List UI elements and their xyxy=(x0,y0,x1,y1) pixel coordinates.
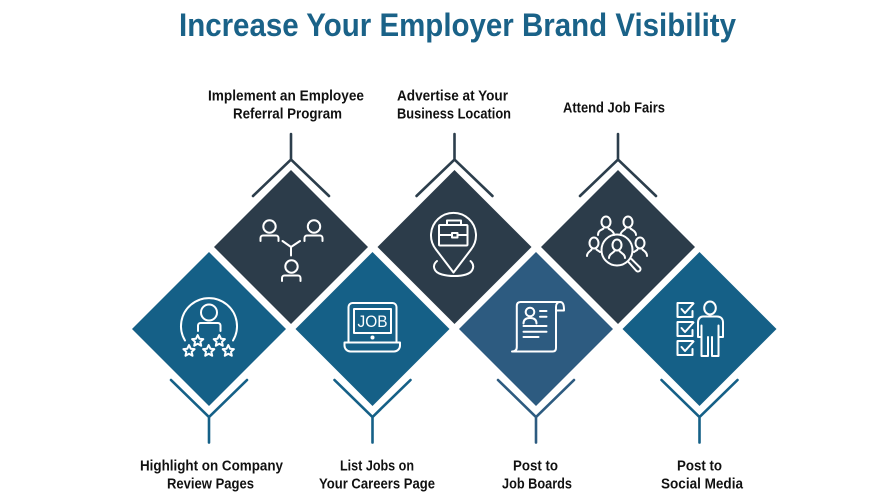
connector: employee referral xyxy=(253,134,329,196)
label: company review pages xyxy=(140,458,283,492)
icon: rated person xyxy=(181,298,237,356)
panel: business location xyxy=(378,88,532,324)
icon: referral network xyxy=(260,220,322,281)
label: job fairs: Attend Job Fairs xyxy=(563,100,665,116)
diamond: business location xyxy=(378,170,532,324)
icon: laptop with job text: JOB xyxy=(358,313,388,331)
connector: job boards xyxy=(498,380,574,442)
panel: job boards xyxy=(459,252,613,492)
label: business location: Advertise at Your xyxy=(397,88,508,104)
label: social media xyxy=(661,458,744,492)
diamond: job fairs xyxy=(541,170,695,324)
panel: job fairs xyxy=(541,100,695,324)
diamond: job boards xyxy=(459,252,613,406)
icon: people under magnifier xyxy=(587,216,647,271)
label: company review pages: Highlight on Company xyxy=(140,458,283,474)
panel: careers page xyxy=(296,252,450,492)
label: careers page: List Jobs on xyxy=(340,458,414,474)
panel: employee referral xyxy=(208,88,368,324)
connector: careers page xyxy=(334,380,410,442)
label: job boards xyxy=(502,458,572,492)
label: business location: Business Location xyxy=(397,106,511,122)
icon: briefcase location pin xyxy=(431,213,476,276)
icon: laptop with job text xyxy=(344,303,400,352)
diamond: careers page xyxy=(296,252,450,406)
connector: social media xyxy=(662,380,738,442)
label: careers page xyxy=(319,458,435,492)
icon: resume scroll xyxy=(512,302,564,352)
panel: social media xyxy=(622,252,776,492)
connector: business location xyxy=(416,134,492,196)
diamond: employee referral xyxy=(214,170,368,324)
connector: company review pages xyxy=(171,380,247,442)
connector: job fairs xyxy=(580,134,656,196)
label: job boards: Post to xyxy=(513,458,558,474)
label: social media: Post to xyxy=(677,458,722,474)
label: careers page: Your Careers Page xyxy=(319,476,435,492)
diamond: company review pages xyxy=(132,252,286,406)
label: business location xyxy=(397,88,511,122)
label: job boards: Job Boards xyxy=(502,476,572,492)
label: employee referral xyxy=(208,88,364,122)
label: social media: Social Media xyxy=(661,476,744,492)
label: employee referral: Implement an Employee xyxy=(208,88,364,104)
diamond: social media xyxy=(622,252,776,406)
panel: company review pages xyxy=(132,252,286,492)
label: company review pages: Review Pages xyxy=(167,476,254,492)
title: Increase Your Employer Brand Visibility xyxy=(179,7,736,43)
label: employee referral: Referral Program xyxy=(233,106,342,122)
icon: person with checklist xyxy=(678,302,723,356)
